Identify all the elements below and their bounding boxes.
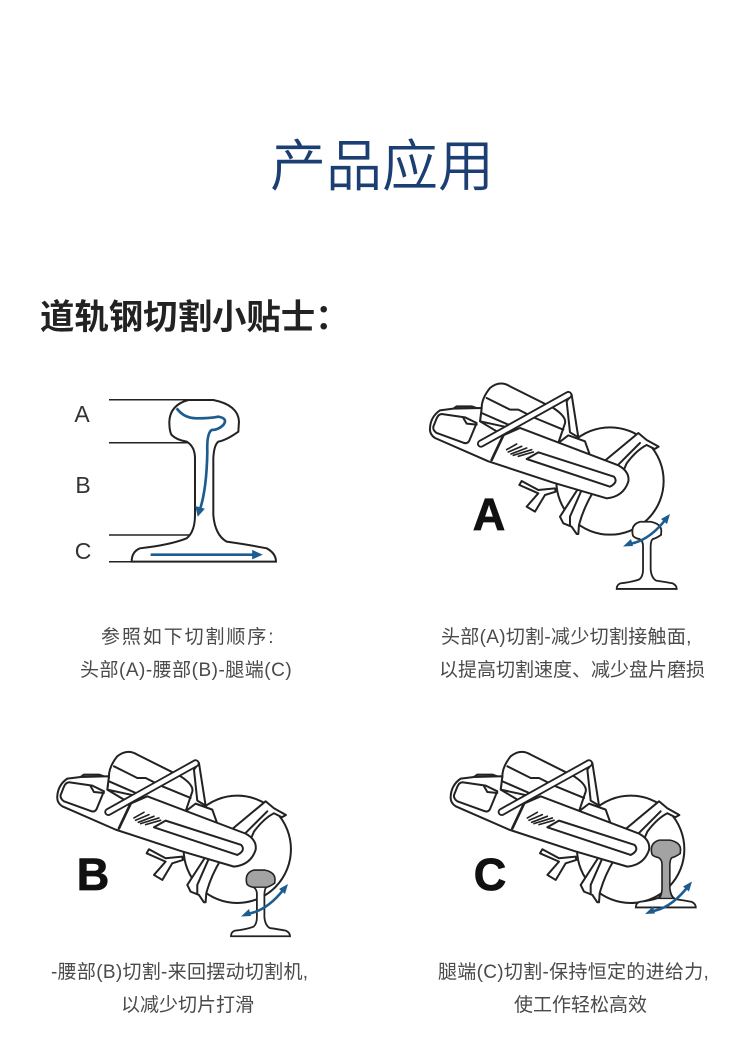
rail [636,840,696,907]
label B: B [75,472,91,498]
caption: A: 以提高切割速度、减少盘片磨损 [439,660,705,681]
rail [231,870,290,936]
caption: B: 以减少切片打滑 [121,995,254,1016]
cutting path arrows [151,408,262,559]
caption: C: 腿端(C)切割-保持恒定的进给力, [438,962,709,983]
swing arrow [623,514,670,546]
rail head and web shaded [651,840,680,898]
panel B: saw cutting rail web [57,752,291,936]
caption: B [51,962,308,1016]
caption: B: -腰部(B)切割-来回摆动切割机, [51,962,308,983]
letter B: B [77,849,109,900]
label C: C [75,538,91,564]
swing arrow [645,882,692,914]
caption: C: 使工作轻松高效 [514,995,647,1016]
caption: cutting order [80,626,292,681]
swing arrow [241,884,288,916]
panel C: saw cutting rail foot [451,752,696,914]
rail cross-section diagram [74,400,276,564]
caption: cutting order: 头部(A)-腰部(B)-腿端(C) [80,660,292,681]
letter C: C [474,849,506,900]
label A: A [74,401,90,427]
letter A: A [473,489,505,540]
caption: A: 头部(A)切割-减少切割接触面, [441,627,692,648]
heading: rail cutting tips: 道轨钢切割小贴士： [40,289,350,339]
icon: saw [57,752,291,903]
caption: A [439,626,705,681]
title: 产品应用 [270,122,494,203]
icon: saw [430,384,664,535]
caption: cutting order: 参照如下切割顺序: [101,627,275,648]
panel A: saw cutting rail head [430,384,677,589]
rail head shaded [246,870,275,887]
caption: C [438,962,709,1016]
rail with head contact [617,522,677,589]
icon: saw [451,752,684,903]
guide lines [109,400,276,562]
rail outline [132,400,276,562]
